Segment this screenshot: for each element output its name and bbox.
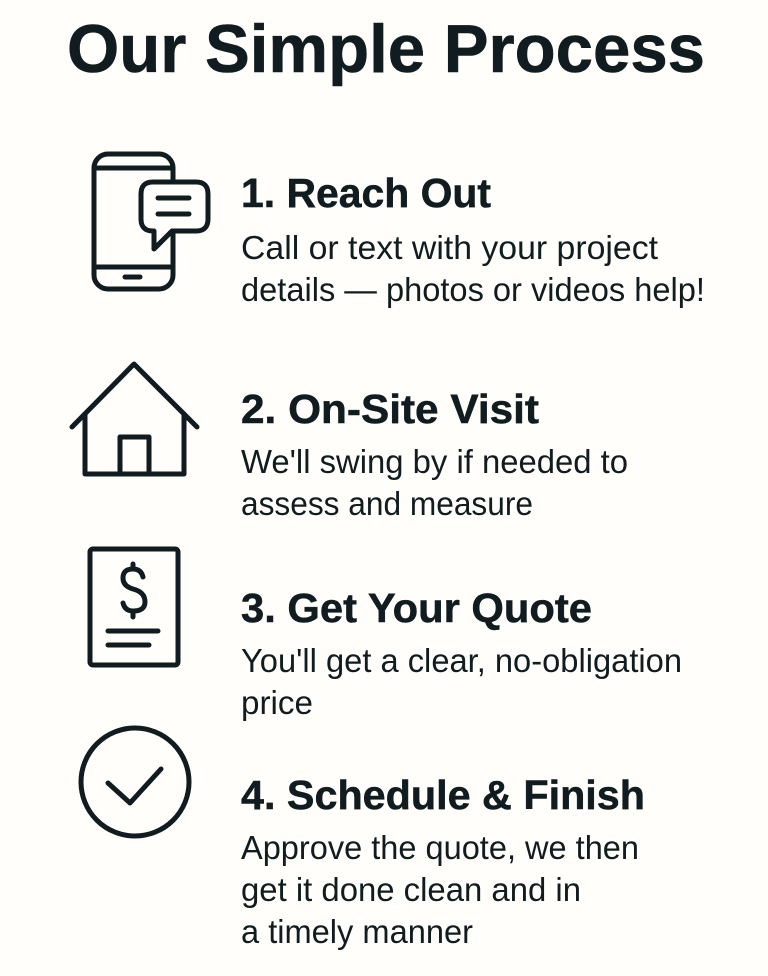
icon: check mark in circle — [81, 728, 189, 836]
description: step 1 — [241, 230, 705, 309]
heading: step 4: 4. Schedule & Finish — [241, 772, 645, 818]
description: step 2: assess and measure — [241, 486, 533, 523]
heading: step 2: 2. On-Site Visit — [241, 386, 539, 432]
description: step 3 — [241, 643, 682, 722]
icon: quote document with dollar sign — [90, 549, 178, 665]
heading: step 1: 1. Reach Out — [241, 170, 491, 216]
heading: step 3: 3. Get Your Quote — [241, 585, 592, 631]
title: Our Simple Process — [67, 11, 705, 87]
description: step 4: a timely manner — [241, 914, 473, 951]
description: step 2 — [241, 444, 628, 523]
icon: house — [72, 364, 197, 474]
description: step 1: details — photos or videos help! — [241, 272, 705, 309]
description: step 4: get it done clean and in — [241, 872, 581, 909]
step 2: on-site visit — [72, 364, 628, 523]
step 1: reach out — [94, 154, 705, 309]
description: step 3: price — [241, 685, 313, 722]
description: step 1: Call or text with your project — [241, 230, 659, 267]
description: step 4: Approve the quote, we then — [241, 830, 639, 867]
description: step 3: You'll get a clear, no-obligation — [241, 643, 682, 680]
description: step 2: We'll swing by if needed to — [241, 444, 628, 481]
step 4: schedule and finish — [81, 728, 645, 951]
icon: smartphone with chat bubble — [94, 154, 208, 289]
step 3: get your quote — [90, 549, 682, 722]
description: step 4 — [241, 830, 639, 951]
